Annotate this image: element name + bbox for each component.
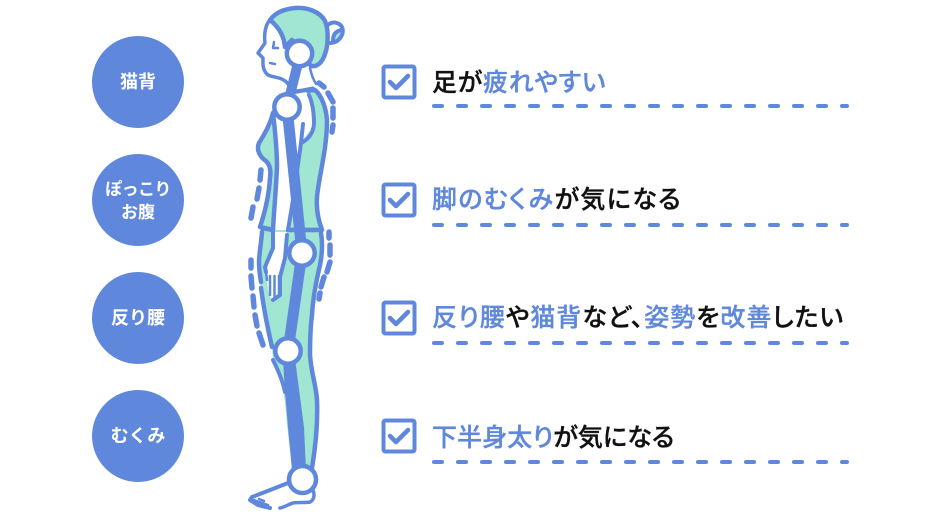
thigh and calf bbox=[259, 230, 321, 468]
dashed rule 1 bbox=[434, 104, 847, 108]
joint: hip bbox=[289, 240, 315, 266]
check item icon 2 bbox=[384, 184, 414, 216]
check item icon 3 bbox=[384, 302, 414, 334]
label: 猫背: 猫背 bbox=[120, 72, 156, 92]
joint: ankle bbox=[289, 466, 316, 493]
check text 4: 下半身太りが気になる bbox=[432, 424, 674, 452]
label: 反り腰 bbox=[92, 272, 184, 364]
hair bun bbox=[333, 30, 342, 41]
forearm and hand bbox=[265, 232, 287, 300]
face bbox=[258, 20, 296, 92]
dashed rule 3 bbox=[434, 341, 847, 345]
joint: knee bbox=[275, 338, 301, 364]
joint: ear bbox=[287, 41, 312, 66]
label: むくみ bbox=[92, 390, 184, 482]
label: むくみ: むくみ bbox=[111, 426, 165, 446]
joint: shoulder bbox=[274, 94, 300, 120]
label: ぽっこりお腹: お腹 bbox=[121, 202, 155, 222]
label: ぽっこりお腹 bbox=[92, 154, 184, 246]
check item icon 1 bbox=[384, 66, 414, 98]
label: ぽっこりお腹: ぽっこり bbox=[105, 180, 171, 198]
arm bbox=[273, 92, 313, 230]
label: 猫背 bbox=[92, 36, 184, 128]
dashed rule 4 bbox=[434, 460, 847, 464]
check text 2: 脚のむくみが気になる bbox=[432, 186, 682, 214]
alignment line bbox=[287, 55, 300, 107]
foot bbox=[250, 483, 288, 508]
dashed contours bbox=[251, 83, 333, 345]
check text 1: 足が疲れやすい bbox=[432, 69, 606, 97]
check item icon 4 bbox=[384, 420, 414, 452]
check text 3: 反り腰や猫背など、姿勢を改善したい bbox=[432, 304, 844, 332]
torso bbox=[258, 90, 327, 230]
hair bbox=[270, 8, 328, 66]
dashed rule 2 bbox=[434, 223, 847, 227]
label: 反り腰: 反り腰 bbox=[111, 308, 165, 328]
